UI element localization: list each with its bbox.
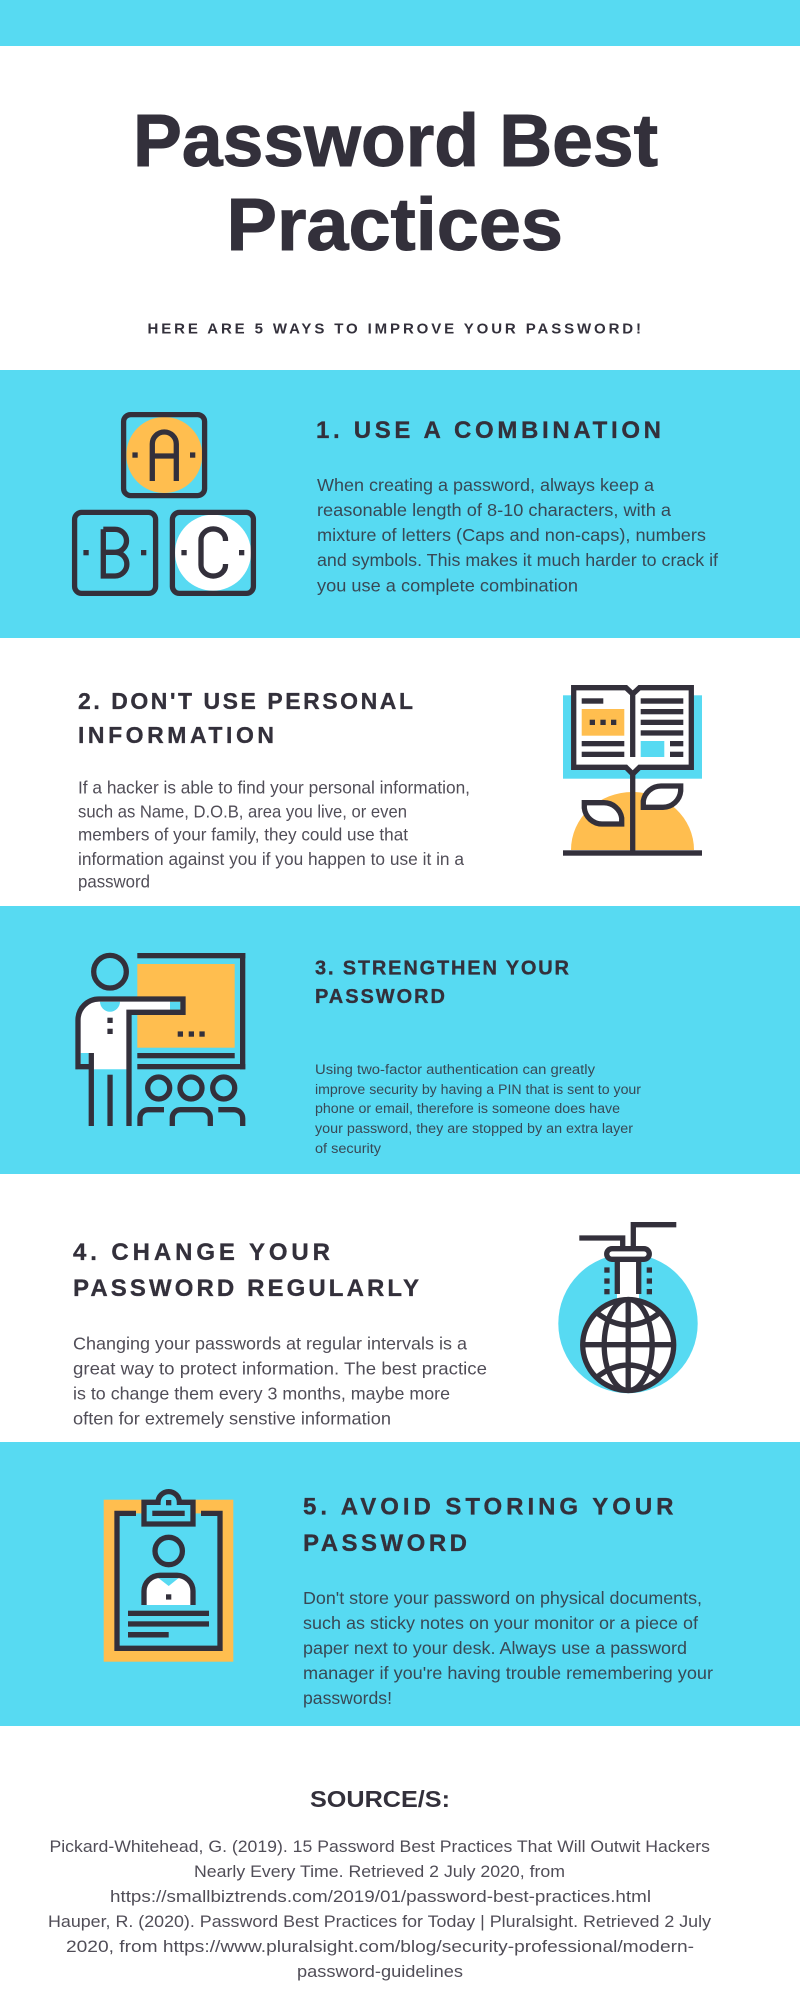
text: avoid storing: paper next to your desk. Always use a password [303, 1638, 687, 1658]
title [133, 99, 658, 266]
icon: presenter and audience [78, 953, 245, 1126]
title: Password Best [133, 99, 658, 182]
text: strengthen your password: improve security by having a PIN that is sent to your [315, 1082, 641, 1098]
text: strengthen your password: your password, they are stopped by an extra layer [315, 1121, 633, 1137]
text: personal information: information against you if you happen to use it in a [78, 849, 464, 869]
heading: change regularly: PASSWORD REGULARLY [73, 1275, 419, 1302]
text: sources list: Nearly Every Time. Retrieved 2 July 2020, from [194, 1862, 565, 1881]
text: avoid storing: manager if you're having trouble remembering your [303, 1663, 713, 1683]
text: use a combination: mixture of letters (Caps and non-caps), numbers [317, 525, 706, 545]
panel: use a combination [0, 370, 800, 638]
panel: personal information [0, 638, 800, 906]
icon: ABC blocks [75, 415, 253, 593]
text: personal information: password [78, 872, 150, 892]
heading: personal information [78, 688, 413, 748]
title: Practices [226, 183, 563, 266]
text: sources list: 2020, from https://www.pluralsight.com/blog/security-professional/modern- [66, 1937, 694, 1956]
heading: avoid storing: 5. AVOID STORING YOUR [303, 1494, 674, 1521]
text: avoid storing: passwords! [303, 1688, 392, 1708]
text: use a combination: and symbols. This makes it much harder to crack if [317, 550, 718, 570]
text: strengthen your password [315, 1062, 641, 1157]
heading: sources: SOURCE/S: [310, 1786, 450, 1812]
text: personal information [78, 777, 470, 892]
text: change regularly: great way to protect information. The best practice [73, 1358, 487, 1378]
text: strengthen your password: of security [315, 1141, 382, 1157]
text: personal information: If a hacker is able to find your personal information, [78, 777, 470, 797]
text: personal information: members of your family, they could use that [78, 825, 408, 845]
text: use a combination: you use a complete combination [317, 576, 578, 596]
text: strengthen your password: Using two-factor authentication can greatly [315, 1062, 596, 1078]
icon: open book plant [563, 688, 702, 856]
icon: globe network [558, 1225, 698, 1393]
text: avoid storing: Don't store your password on physical documents, [303, 1588, 702, 1608]
heading: personal information: 2. DON'T USE PERSONAL [78, 688, 413, 714]
text: sources list: Pickard-Whitehead, G. (2019). 15 Password Best Practices That Will Outwit Hackers [50, 1837, 710, 1856]
text: use a combination [317, 475, 718, 596]
panel: avoid storing [0, 1442, 800, 1726]
text: change regularly: is to change them every 3 months, maybe more [73, 1383, 450, 1403]
text: change regularly [73, 1333, 487, 1428]
text: change regularly: Changing your passwords at regular intervals is a [73, 1333, 467, 1353]
heading: strengthen your password: 3. STRENGTHEN YOUR [315, 958, 570, 980]
text: avoid storing [303, 1588, 713, 1708]
text: sources list: password-guidelines [297, 1962, 463, 1981]
text: sources list [48, 1837, 712, 1981]
subtitle: HERE ARE 5 WAYS TO IMPROVE YOUR PASSWORD! [148, 320, 641, 338]
heading: avoid storing: PASSWORD [303, 1530, 467, 1557]
heading: use a combination: 1. USE A COMBINATION [316, 417, 661, 444]
icon: clipboard profile [104, 1492, 233, 1662]
text: strengthen your password: phone or email, therefore is someone does have [315, 1101, 620, 1117]
text: avoid storing: such as sticky notes on your monitor or a piece of [303, 1613, 698, 1633]
heading: change regularly: 4. CHANGE YOUR [73, 1239, 330, 1266]
heading: strengthen your password: PASSWORD [315, 986, 445, 1008]
heading: strengthen your password [315, 958, 570, 1008]
top banner [0, 0, 800, 46]
heading: change regularly [73, 1239, 419, 1302]
text: change regularly: often for extremely senstive information [73, 1408, 391, 1428]
text: sources list: Hauper, R. (2020). Password Best Practices for Today | Pluralsight. Retrieved 2 July [48, 1912, 712, 1931]
text: personal information: such as Name, D.O.B, area you live, or even [78, 802, 407, 822]
text: sources list: https://smallbiztrends.com/2019/01/password-best-practices.html [110, 1887, 651, 1906]
panel: strengthen your password [0, 906, 800, 1174]
panel: change regularly [0, 1174, 800, 1442]
text: use a combination: When creating a password, always keep a [317, 475, 654, 495]
heading: avoid storing [303, 1494, 674, 1557]
text: use a combination: reasonable length of 8-10 characters, with a [317, 500, 671, 520]
heading: personal information: INFORMATION [78, 722, 274, 748]
